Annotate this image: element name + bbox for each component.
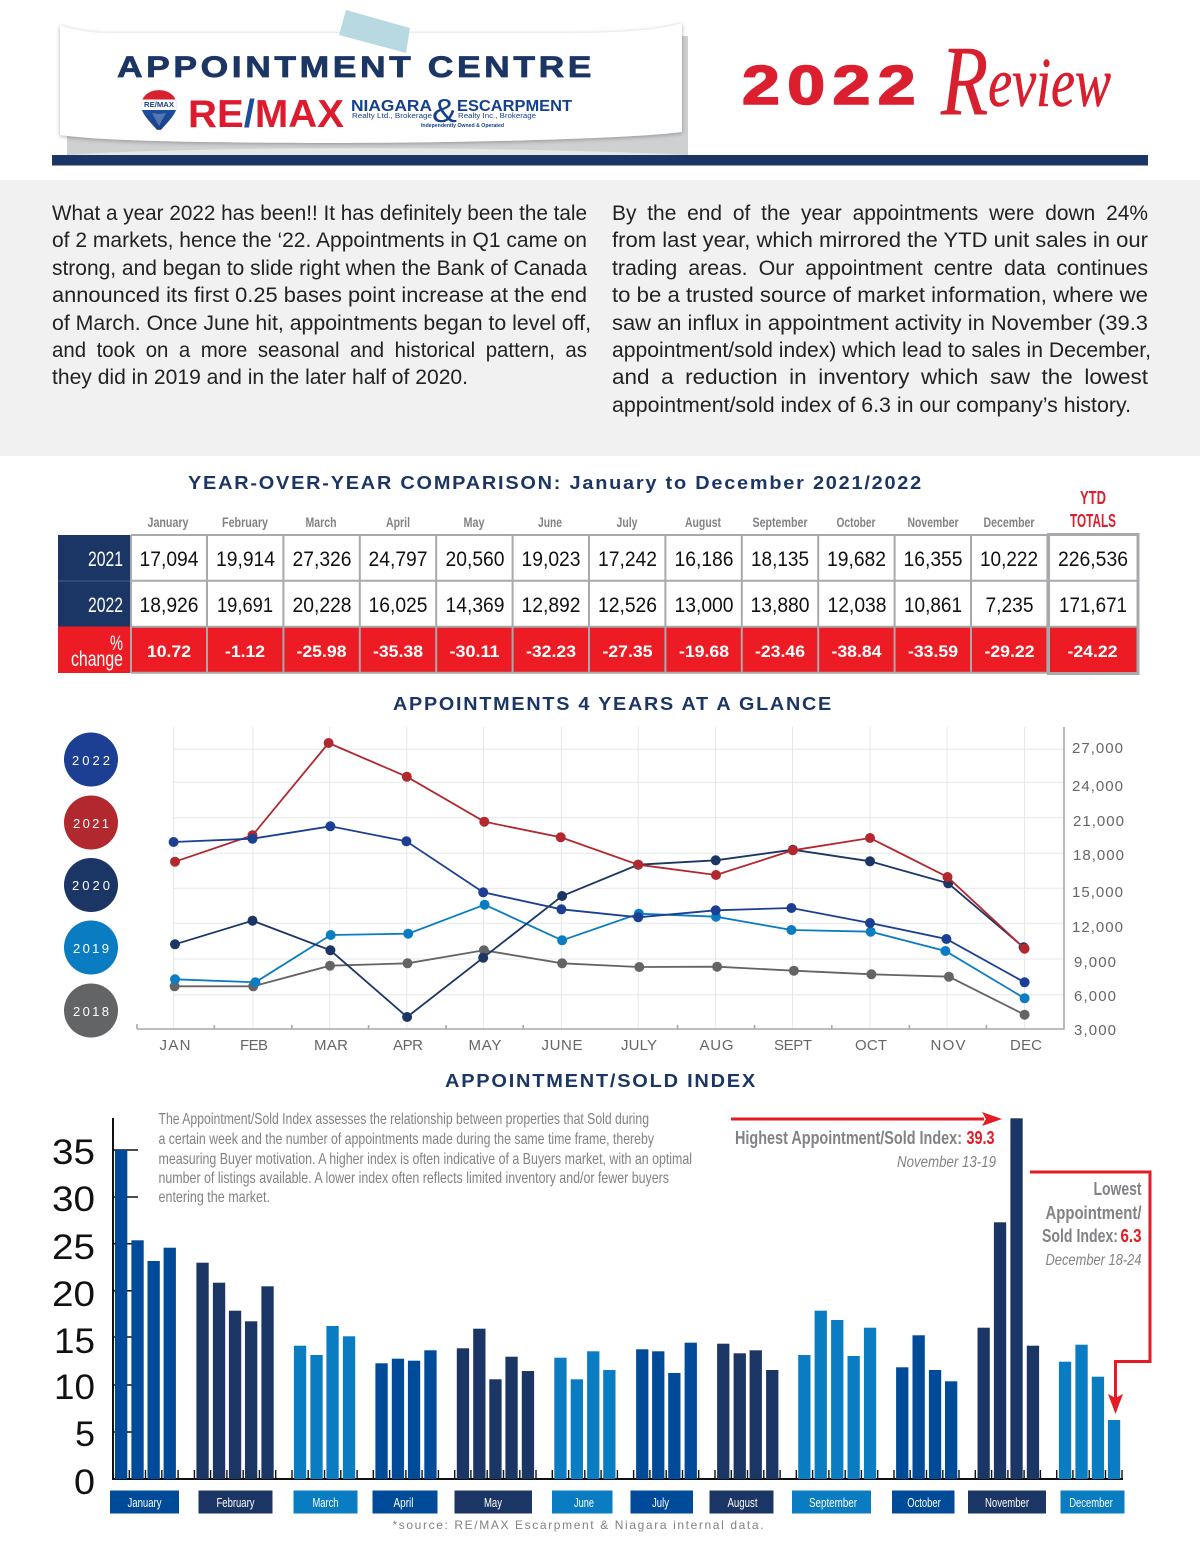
text block: index description xyxy=(158,1111,692,1206)
text block: left column xyxy=(52,202,591,389)
row: 2022 xyxy=(88,594,1127,617)
month labels: May xyxy=(484,1495,502,1510)
y axis labels: 15,000 xyxy=(1072,884,1123,901)
callout: lowest index: Lowest xyxy=(1094,1179,1142,1199)
callout: highest index: Highest Appointment/Sold Index: xyxy=(735,1128,962,1148)
x axis labels: JULY xyxy=(621,1037,657,1054)
month labels: April xyxy=(394,1495,414,1510)
legend: years: 2018 xyxy=(73,1004,109,1019)
text block: right column: trading areas. Our appointment centre data continues xyxy=(612,257,1148,280)
row: 2021: 17,242 xyxy=(598,548,657,571)
text block: index description: number of listings available. A lower index often reflects limited inventory and/or fewer buyers xyxy=(158,1170,669,1187)
row: 2022: 14,369 xyxy=(446,594,504,617)
y axis labels: 9,000 xyxy=(1074,954,1116,971)
text block: index description: measuring Buyer motivation. A higher index is often indicative of a Buyers market, with an optimal xyxy=(158,1151,692,1168)
x axis labels: MAY xyxy=(468,1037,502,1054)
row: 2022: 18,926 xyxy=(140,594,198,617)
month header row: July xyxy=(616,514,638,530)
heading: appointment/sold index: APPOINTMENT/SOLD INDEX xyxy=(445,1071,757,1091)
month header row: August xyxy=(685,514,721,530)
month header row: April xyxy=(386,514,410,530)
logo wordmark: & xyxy=(432,92,457,129)
legend: years xyxy=(64,732,118,1038)
text block: right column xyxy=(612,202,1151,417)
bars: January xyxy=(115,1150,176,1479)
month labels: March xyxy=(312,1495,338,1510)
bars: December xyxy=(1059,1345,1120,1479)
text block: right column: to be a trusted source of market information, where we xyxy=(612,284,1148,307)
y axis labels: 27,000 xyxy=(1072,740,1123,757)
legend: years: 2021 xyxy=(73,816,109,831)
bars: August xyxy=(717,1344,778,1479)
x axis labels: DEC xyxy=(1010,1037,1042,1054)
text block: left column: and took on a more seasonal and historical pattern, as xyxy=(52,339,587,362)
y axis labels: 12,000 xyxy=(1072,919,1123,936)
logo wordmark: RE/MAX xyxy=(188,93,344,136)
text block: right column: By the end of the year appointments were down 24% xyxy=(612,202,1148,225)
row: 2022: 13,000 xyxy=(674,594,734,617)
row: 2022: 16,025 xyxy=(368,594,428,617)
icon: RE/MAX balloon: RE/MAX xyxy=(144,102,174,109)
x axis labels: FEB xyxy=(240,1037,268,1054)
row: percent change: % xyxy=(110,632,123,655)
x axis labels: JAN xyxy=(160,1037,190,1054)
row: percent change: -33.59 xyxy=(908,642,958,661)
month labels: September xyxy=(809,1495,858,1510)
month labels: July xyxy=(652,1495,669,1510)
bar chart: appointment/sold index xyxy=(52,1118,1124,1514)
row: percent change: -25.98 xyxy=(296,642,346,661)
row: 2022: 2022 xyxy=(88,594,123,617)
row: percent change: -19.68 xyxy=(679,642,729,661)
row: percent change: -30.11 xyxy=(450,642,500,661)
row: percent change: -27.35 xyxy=(602,642,652,661)
row: 2022: 171,671 xyxy=(1059,594,1127,617)
title: 2022 Review: 2022 xyxy=(742,54,923,116)
text block: left column: strong, and began to slide right when the Bank of Canada xyxy=(52,257,587,280)
row: 2022: 13,880 xyxy=(750,594,810,617)
y axis labels: 6,000 xyxy=(1074,988,1116,1005)
row: 2021: 19,914 xyxy=(216,548,275,571)
row: 2021: 10,222 xyxy=(980,548,1038,571)
month header row: June xyxy=(538,514,562,530)
row: 2021: 24,797 xyxy=(368,548,428,571)
bars: June xyxy=(554,1351,616,1479)
month labels: November xyxy=(985,1495,1029,1510)
callout: lowest index: Appointment/ xyxy=(1046,1203,1142,1223)
y axis: 15 xyxy=(54,1322,95,1361)
logo wordmark xyxy=(188,92,572,136)
month header row xyxy=(148,514,1035,530)
text block: left column: What a year 2022 has been!! It has definitely been the tale xyxy=(52,202,587,225)
logo wordmark: Realty Ltd., Brokerage xyxy=(352,113,432,120)
title: 2022 Review xyxy=(742,25,1111,136)
paper note xyxy=(60,23,682,143)
x axis labels: MAR xyxy=(314,1037,348,1054)
heading: appointments 4 years at a glance: APPOINTMENTS 4 YEARS AT A GLANCE xyxy=(393,694,833,714)
callout: lowest index xyxy=(1030,1172,1150,1414)
month header row: February xyxy=(222,514,268,530)
y axis labels: 21,000 xyxy=(1073,813,1124,830)
y axis: 25 xyxy=(52,1228,95,1267)
text block: index description: entering the market. xyxy=(158,1189,270,1206)
bars: November xyxy=(978,1118,1039,1479)
legend: years: 2020 xyxy=(72,878,110,893)
row: 2021: 16,186 xyxy=(674,548,734,571)
arrow: to December low xyxy=(1030,1172,1150,1414)
x axis labels: APR xyxy=(393,1037,423,1054)
row: 2021: 18,135 xyxy=(751,548,809,571)
row: 2021 xyxy=(88,548,1128,571)
x axis labels: JUNE xyxy=(542,1037,582,1054)
month header row: December xyxy=(984,514,1035,530)
callout: highest index xyxy=(731,1112,1002,1171)
text block: index description: a certain week and the number of appointments made during the same time frame, thereby xyxy=(158,1131,654,1148)
row: 2021: 2021 xyxy=(88,548,123,571)
y axis: 20 xyxy=(52,1275,95,1314)
row fills xyxy=(58,534,1139,674)
text block: index description: The Appointment/Sold Index assesses the relationship between properties that Sold during xyxy=(158,1111,649,1128)
row: 2021: 16,355 xyxy=(904,548,962,571)
heading: appointment centre: APPOINTMENT CENTRE xyxy=(117,51,595,84)
month header row: January xyxy=(148,514,189,530)
YTD totals header: YTD xyxy=(1080,488,1106,508)
text block: left column: of March. Once June hit, appointments began to level off, xyxy=(52,312,591,335)
logo wordmark: NIAGARA xyxy=(351,98,432,115)
month labels xyxy=(110,1490,1124,1514)
bars: February xyxy=(196,1263,274,1479)
x axis labels: NOV xyxy=(930,1037,966,1054)
series 2018 xyxy=(170,945,1030,1020)
text block: right column: appointment/sold index of 6.3 in our company’s history. xyxy=(612,394,1131,417)
bars: May xyxy=(457,1329,534,1479)
row: percent change: -24.22 xyxy=(1068,642,1118,661)
y axis: 10 xyxy=(54,1368,95,1407)
month labels: December xyxy=(1069,1495,1113,1510)
header banner xyxy=(60,10,688,155)
x axis labels xyxy=(160,1037,1042,1054)
legend: years: 2019 xyxy=(73,941,109,956)
text block: right column: saw an influx in appointment activity in November (39.3 xyxy=(612,312,1148,335)
panel: intro text xyxy=(0,180,1200,456)
series 2020 xyxy=(170,845,1029,1022)
header rule xyxy=(52,155,1148,166)
y axis labels: 24,000 xyxy=(1072,778,1123,795)
row: percent change: -29.22 xyxy=(984,642,1034,661)
y axis: 30 xyxy=(52,1180,95,1219)
y axis: 0 xyxy=(74,1463,95,1502)
bars: July xyxy=(636,1343,697,1479)
row: 2021: 19,682 xyxy=(827,548,886,571)
row: 2021: 20,560 xyxy=(446,548,504,571)
row: 2022: 10,861 xyxy=(904,594,962,617)
y axis: 35 xyxy=(52,1133,95,1172)
YTD totals header: TOTALS xyxy=(1070,511,1116,531)
row: percent change: -1.12 xyxy=(225,642,265,661)
bars: April xyxy=(375,1350,437,1479)
table: year-over-year comparison xyxy=(58,488,1139,674)
title: 2022 Review: R xyxy=(940,25,988,136)
title: 2022 Review: eview xyxy=(988,45,1111,122)
row: 2022: 12,038 xyxy=(828,594,886,617)
row: percent change: -32.23 xyxy=(526,642,576,661)
month labels: October xyxy=(907,1495,941,1510)
heading: year-over-year comparison: YEAR-OVER-YEAR COMPARISON: January to December 2021/2022 xyxy=(188,473,923,493)
callout: lowest index: December 18-24 xyxy=(1046,1252,1142,1269)
source note: *source: RE/MAX Escarpment & Niagara internal data. xyxy=(392,1518,764,1532)
icon: RE/MAX balloon xyxy=(141,90,177,130)
row: 2022: 12,892 xyxy=(522,594,580,617)
bars: October xyxy=(896,1335,957,1479)
month header row: May xyxy=(464,514,485,530)
callout: lowest index: Sold Index: xyxy=(1042,1226,1118,1246)
x axis labels: AUG xyxy=(700,1037,734,1054)
series 2022 xyxy=(169,821,1030,987)
tape xyxy=(339,10,410,53)
row: percent change xyxy=(71,632,1118,671)
text block: right column: from last year, which mirrored the YTD unit sales in our xyxy=(612,229,1148,252)
y axis: 5 xyxy=(75,1415,95,1454)
bars: September xyxy=(798,1311,876,1479)
text block: right column: and a reduction in inventory which saw the lowest xyxy=(612,366,1148,389)
row: 2022: 7,235 xyxy=(986,594,1034,617)
series 2021 xyxy=(170,738,1030,954)
callout: lowest index: 6.3 xyxy=(1120,1226,1142,1246)
logo wordmark: Realty Inc., Brokerage xyxy=(458,113,536,120)
row: percent change: 10.72 xyxy=(147,642,191,661)
y axis labels: 3,000 xyxy=(1074,1022,1116,1039)
month header row: October xyxy=(836,514,876,530)
YTD totals header xyxy=(1070,488,1116,531)
month labels: June xyxy=(574,1495,594,1510)
legend: years: 2022 xyxy=(72,753,110,768)
row: 2021: 226,536 xyxy=(1058,548,1128,571)
callout: highest index: 39.3 xyxy=(966,1128,994,1148)
row: percent change: change xyxy=(71,648,123,671)
row: 2021: 19,023 xyxy=(522,548,580,571)
arrow: to November peak xyxy=(731,1112,1002,1126)
row: 2022: 19,691 xyxy=(217,594,273,617)
line chart: appointments by month xyxy=(137,727,1124,1054)
month header row: March xyxy=(306,514,336,530)
logo wordmark: ESCARPMENT xyxy=(457,98,572,115)
logo wordmark: Independently Owned & Operated xyxy=(421,123,504,129)
row: 2021: 17,094 xyxy=(140,548,199,571)
month labels: August xyxy=(728,1495,758,1510)
row: percent change: -23.46 xyxy=(755,642,805,661)
bars: March xyxy=(294,1326,355,1479)
x axis labels: OCT xyxy=(855,1037,887,1054)
row: percent change: -35.38 xyxy=(373,642,423,661)
text block: right column: appointment/sold index) which lead to sales in December, xyxy=(612,339,1151,362)
row: 2021: 27,326 xyxy=(292,548,352,571)
y axis labels: 18,000 xyxy=(1073,847,1124,864)
text block: left column: announced its first 0.25 bases point increase at the end xyxy=(52,284,587,307)
month labels: January xyxy=(128,1495,162,1510)
month labels: February xyxy=(216,1495,255,1510)
y axis xyxy=(52,1118,1123,1502)
x axis labels: SEPT xyxy=(774,1037,812,1054)
y axis labels xyxy=(1072,740,1124,1039)
series 2019 xyxy=(170,900,1030,1003)
month header row: September xyxy=(752,514,808,530)
row: 2022: 20,228 xyxy=(292,594,352,617)
text block: left column: they did in 2019 and in the later half of 2020. xyxy=(52,366,468,389)
month header row: November xyxy=(908,514,959,530)
text block: left column: of 2 markets, hence the ‘22. Appointments in Q1 came on xyxy=(52,229,587,252)
row: percent change: -38.84 xyxy=(832,642,882,661)
row: 2022: 12,526 xyxy=(598,594,657,617)
callout: highest index: November 13-19 xyxy=(897,1154,996,1171)
